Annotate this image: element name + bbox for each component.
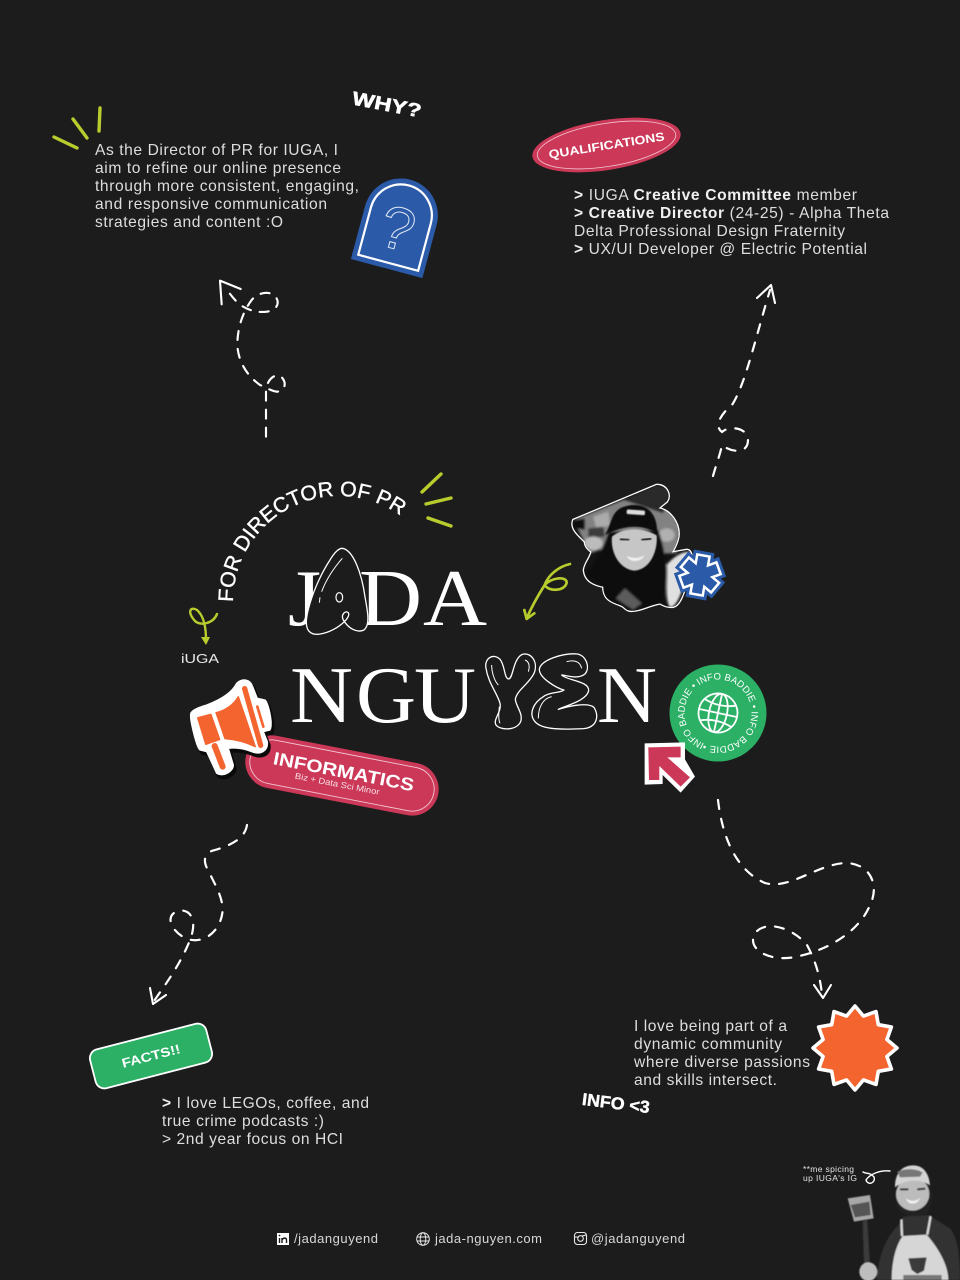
title: jada: A <box>423 553 487 643</box>
text block: info: where diverse passions <box>633 1054 810 1071</box>
text block: why statement: strategies and content :O <box>95 214 283 231</box>
title: jada: J <box>288 553 321 643</box>
text block: why statement: aim to refine our online presence <box>95 160 341 177</box>
heading: info: INFO <3 <box>581 1090 651 1117</box>
caption: spicing up iuga: up IUGA's IG <box>803 1173 857 1183</box>
icon: orange starburst <box>813 1006 897 1090</box>
arrow: green swirl to title <box>524 564 570 619</box>
icon: question mark tombstone <box>351 170 446 278</box>
heading badge: qualifications: QUALIFICATIONS <box>548 129 665 162</box>
caption: spicing up iuga <box>803 1164 890 1183</box>
text block: info: I love being part of a <box>634 1018 787 1035</box>
logo: iuga with scribble arrow <box>181 609 219 666</box>
icon: linkedin <box>277 1233 289 1245</box>
heading: why: WHY? <box>350 88 423 122</box>
icon: question mark tombstone: ? <box>373 192 422 265</box>
icon: megaphone <box>191 680 273 778</box>
blob letters y and e <box>486 654 597 729</box>
text block: facts: > 2nd year focus on HCI <box>162 1131 343 1148</box>
text block: facts: true crime podcasts :) <box>162 1113 324 1130</box>
icon: globe <box>695 690 741 736</box>
blob letter a <box>306 548 368 634</box>
footer: linkedin: /jadanguyend <box>294 1231 378 1246</box>
title: nguyen: N <box>597 650 657 740</box>
photo: jada with spatula <box>848 1165 960 1280</box>
text block: info: dynamic community <box>634 1036 782 1053</box>
text block: why statement: As the Director of PR for IUGA, I <box>95 142 338 159</box>
icon: instagram <box>574 1232 586 1244</box>
text block: qualifications: > UX/UI Developer @ Electric Potential <box>574 241 867 258</box>
title: nguyen <box>290 650 657 740</box>
heading badge: qualifications <box>529 109 684 181</box>
arrow: from name to qualifications <box>713 285 775 476</box>
icon: globe <box>417 1233 429 1245</box>
title: nguyen: U <box>414 650 476 740</box>
badge: informatics pill <box>241 731 443 820</box>
text block: info: and skills intersect. <box>634 1072 777 1089</box>
badge: informatics pill: INFORMATICS <box>272 748 416 795</box>
badge: info baddie: INFO BADDIE • INFO BADDIE • INFO BADDIE • <box>678 672 758 753</box>
arrow: from informatics to facts <box>150 825 247 1004</box>
text block: why statement: through more consistent, engaging, <box>95 178 359 195</box>
text block: facts: > I love LEGOs, coffee, and <box>162 1095 369 1112</box>
text block: qualifications: > IUGA Creative Committee member <box>574 187 857 204</box>
caption: spicing up iuga: **me spicing <box>803 1164 854 1174</box>
badge: informatics pill: Biz + Data Sci Minor <box>294 771 381 797</box>
footer: instagram: @jadanguyend <box>591 1231 685 1246</box>
arrow: from badge to info <box>718 800 874 998</box>
arrow: from name to why <box>220 281 285 437</box>
heading badge: facts: FACTS!! <box>120 1041 182 1071</box>
portrait sticker <box>570 483 697 613</box>
title: nguyen: G <box>356 650 416 740</box>
title: jada <box>288 548 487 643</box>
text block: qualifications: > Creative Director (24-25) - Alpha Theta <box>574 205 889 222</box>
heading badge: facts <box>88 1022 214 1090</box>
title: nguyen: N <box>290 650 353 740</box>
footer: website: jada-nguyen.com <box>434 1231 542 1246</box>
icon: cursor arrow <box>645 742 695 793</box>
text block: qualifications: Delta Professional Design Fraternity <box>574 223 845 240</box>
logo: iuga with scribble arrow: iUGA <box>181 651 219 666</box>
accent: green burst top left <box>54 108 100 148</box>
icon: blue star <box>675 548 725 602</box>
accent: green burst by heading <box>422 474 451 526</box>
curved heading: for director of pr: FOR DIRECTOR OF PR <box>218 482 406 601</box>
text block: why statement: and responsive communication <box>95 196 327 213</box>
title: jada: D <box>359 553 422 643</box>
